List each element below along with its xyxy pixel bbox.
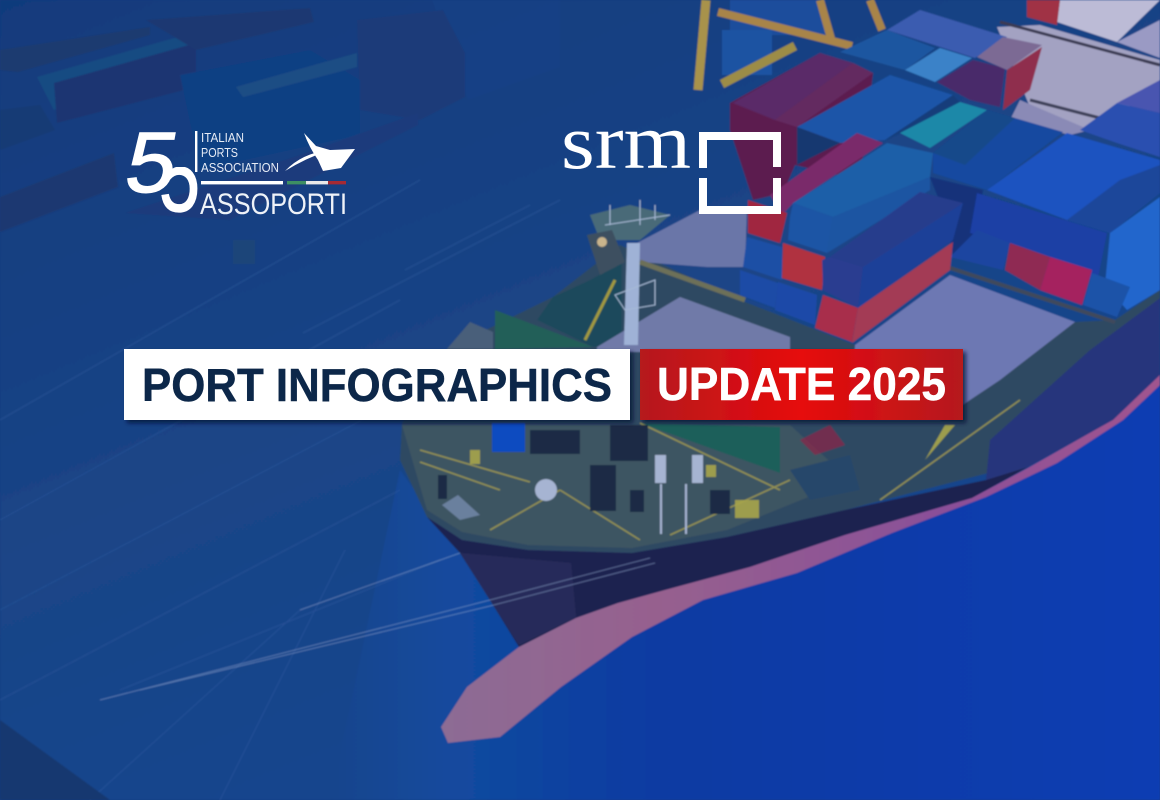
logo ship mark [285,133,355,171]
dock containers top-left [0,0,560,264]
water [330,385,1160,800]
logo wordmark: ASSOPORTI [200,188,347,221]
title banner [124,349,963,420]
logo tricolour rule [201,181,346,184]
forward deck [402,425,850,548]
srm wordmark: srm [561,98,691,185]
logo numerals 55: 5 [159,121,200,233]
logo numerals 55: 5 [119,116,185,211]
main deck [400,245,1160,553]
banner: Update 2025 [640,349,963,420]
crane structure [698,0,882,90]
hull dark band [427,467,1028,647]
upper light deck [997,25,1160,132]
bow deck structures [447,322,493,349]
logo text: Italian Ports Association [201,131,279,175]
container stacks [730,10,1160,343]
logo text: Italian Ports Association: ITALIAN [201,131,244,145]
logo: Assoporti 55 [127,131,355,214]
dock lane streaks [0,180,560,800]
hull side right [986,298,1160,480]
srm square mark [699,132,781,214]
logo numerals 55 [127,132,198,213]
mast [587,200,670,345]
logo text: Italian Ports Association: PORTS [201,146,238,160]
banner: Port Infographics: PORT INFOGRAPHICS [142,359,612,411]
logo text: Italian Ports Association: ASSOCIATION [201,161,279,175]
deck covers [637,210,747,267]
banner: Update 2025: UPDATE 2025 [657,358,946,410]
logo: srm [561,98,781,214]
mooring lines [100,553,655,700]
pink hull stripe and bulbous bow [441,375,1160,743]
